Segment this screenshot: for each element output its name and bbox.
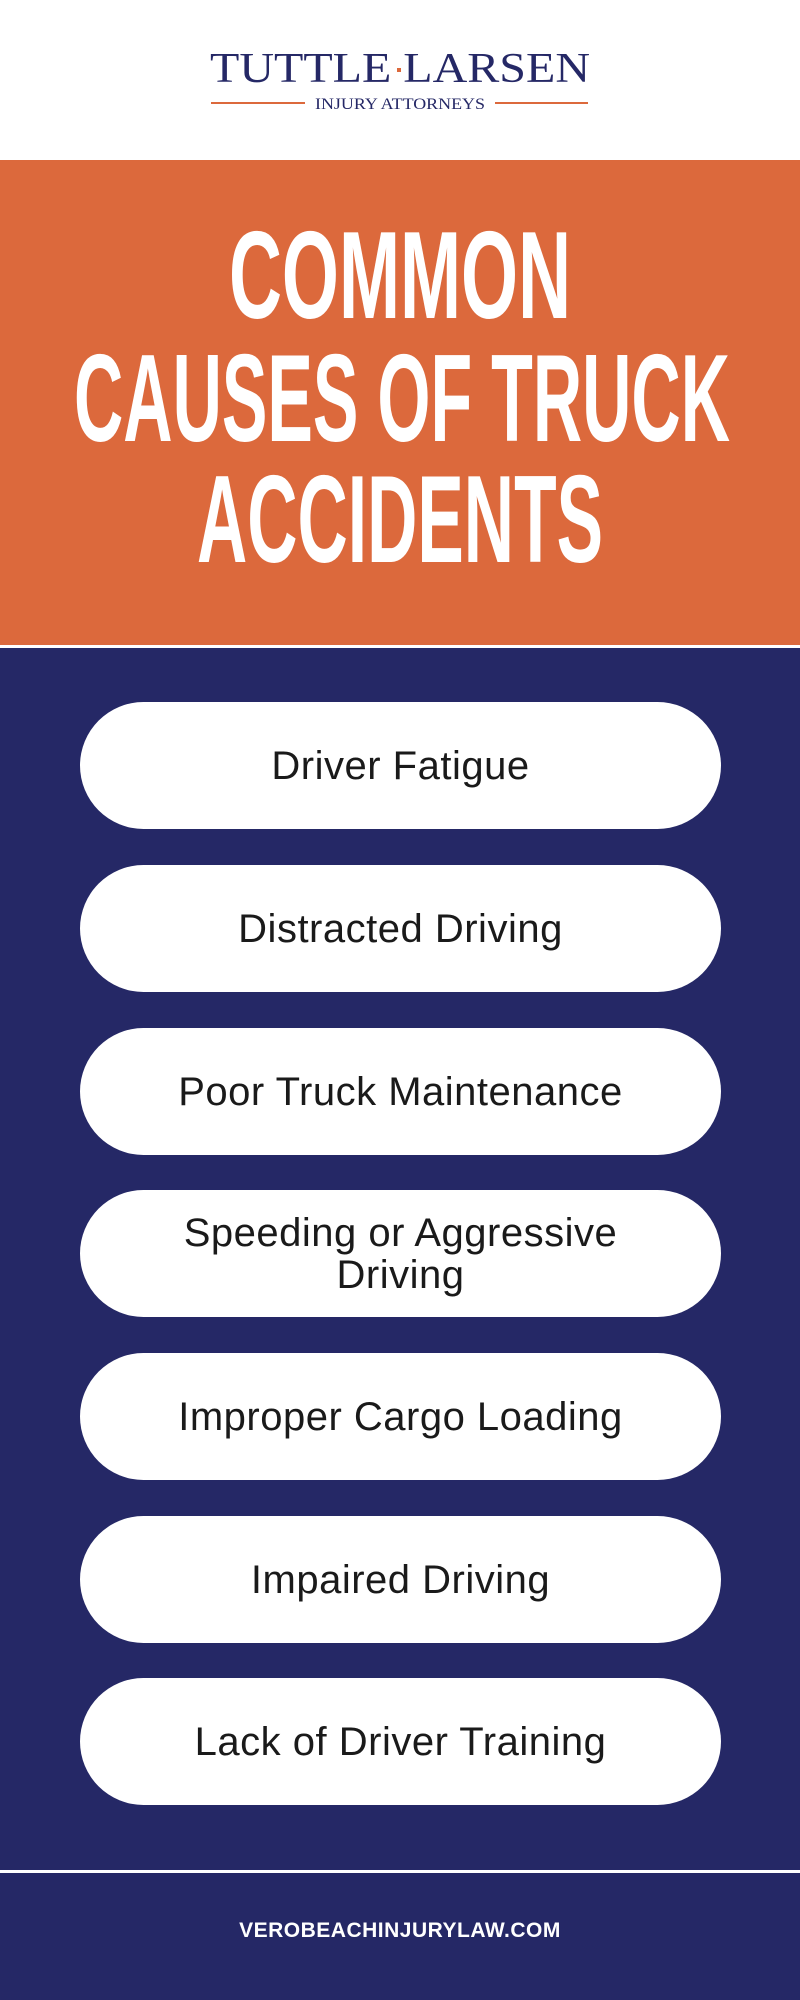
footer url: VEROBEACHINJURYLAW.COM [239, 1919, 561, 1942]
pill: speeding [80, 1190, 721, 1317]
pill: distracted driving: Distracted Driving [238, 906, 563, 950]
pill: training: Lack of Driver Training [195, 1720, 606, 1764]
pill: driver fatigue: Driver Fatigue [271, 744, 530, 788]
logo: INJURY ATTORNEYS [315, 96, 485, 113]
pill: impaired driving: Impaired Driving [251, 1558, 550, 1602]
pill: speeding: Speeding or Aggressive [184, 1210, 617, 1254]
pill: poor truck maintenance: Poor Truck Maintenance [178, 1070, 623, 1114]
title: COMMON [229, 207, 571, 345]
pill: cargo loading [80, 1353, 721, 1480]
header [0, 0, 800, 160]
pill: driver fatigue [80, 702, 721, 829]
title band [0, 160, 800, 645]
logo [210, 46, 590, 113]
logo: TUTTLE LARSEN [210, 46, 590, 92]
pill: impaired driving [80, 1516, 721, 1643]
pill: distracted driving [80, 865, 721, 992]
pill: poor truck maintenance [80, 1028, 721, 1155]
pill: speeding: Driving [336, 1252, 464, 1296]
pill: training [80, 1678, 721, 1805]
pill: cargo loading: Improper Cargo Loading [178, 1394, 623, 1438]
title [74, 207, 730, 589]
